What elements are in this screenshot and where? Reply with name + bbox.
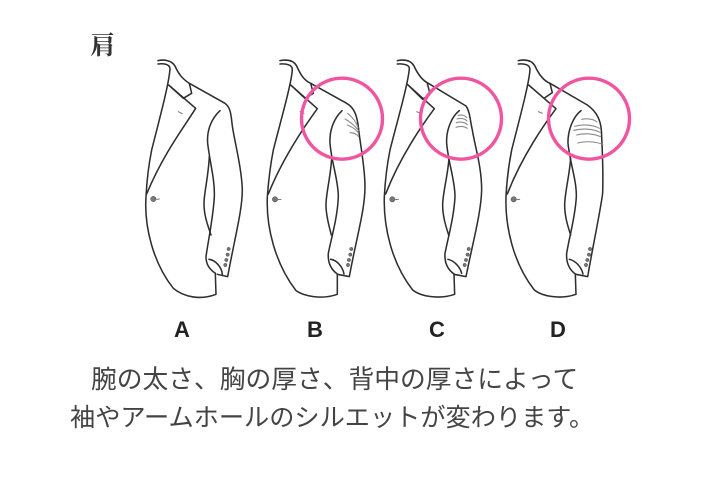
highlight circle B: [302, 78, 382, 159]
highlight circle D: [548, 78, 630, 159]
label B: B: [307, 317, 323, 342]
label A: A: [174, 317, 190, 342]
label C: C: [429, 317, 445, 342]
shoulder wrinkles D: [574, 119, 603, 144]
shoulder wrinkles B: [345, 113, 359, 137]
jacket A: [146, 60, 242, 297]
jacket D: [506, 60, 603, 297]
caption line 1: 腕の太さ、胸の厚さ、背中の厚さによって: [91, 366, 578, 394]
highlight circle C: [420, 78, 502, 159]
heading: shoulder: 肩: [90, 33, 115, 60]
caption line 2: 袖やアームホールのシルエットが変わります。: [70, 404, 594, 432]
label D: D: [550, 317, 566, 342]
shoulder wrinkles C: [456, 115, 467, 128]
jacket B: [267, 60, 365, 297]
jacket C: [384, 60, 482, 297]
